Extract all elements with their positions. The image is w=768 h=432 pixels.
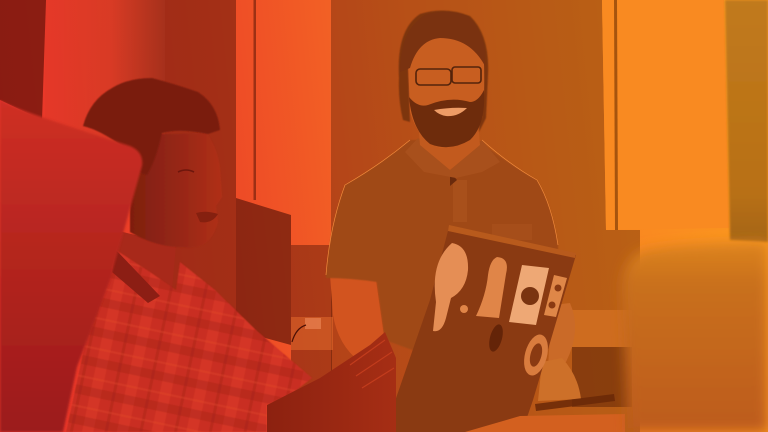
rim light on shirt [326,140,558,275]
outlet shelf [291,317,333,350]
dark space under ledge [572,347,632,407]
white ledge behind man [572,310,632,407]
seated man [66,78,396,432]
right dark column [725,0,768,242]
eye [178,170,194,172]
right arm [548,303,575,366]
shirt [326,140,558,360]
neck and chest [115,230,176,290]
hair [83,78,220,175]
dark column [165,0,236,345]
wall below first window [291,245,332,432]
window glow [602,0,729,230]
sticker: ornate [544,275,567,317]
forearm and hands [267,332,396,432]
lid top edge [448,225,576,258]
foreground blurred laptop left [0,100,142,432]
left arm [330,275,384,362]
wall outlet [291,317,333,350]
sticker: dot [460,305,468,313]
dark tablet [535,394,615,411]
outlet cable [292,325,306,342]
outlet plate [305,318,321,329]
dark shadow at shirt opening [450,172,457,186]
shirt placket [453,180,467,222]
right window [602,0,729,230]
sticker: square frame [509,265,549,325]
table surface [465,414,625,432]
pale wall fade [45,0,165,150]
shirt pocket [492,224,532,240]
hand behind laptop [538,358,581,401]
beard [409,90,484,147]
fingers [350,340,394,388]
hair crown [400,12,485,72]
sticker: dark oval [487,323,505,353]
shirt collar [405,138,500,178]
black speaker box [236,198,291,345]
foreground blurred laptop right [622,242,768,432]
laptop lid [392,227,576,432]
shirt collar [112,250,160,303]
plaid shirt [66,250,312,432]
window left strip line [254,0,256,200]
man's laptop [392,225,576,432]
hair [399,10,488,132]
glasses [416,67,481,85]
sticker: penguin [476,257,507,318]
left dark panel [0,0,46,120]
lips [196,212,218,222]
table items [465,394,625,432]
sticker: round badge [520,332,552,378]
smile [434,108,467,116]
window mullion [614,0,618,230]
sticker: round balloon [433,243,468,331]
ledge [572,310,632,347]
face [130,133,222,247]
central dark wall [331,0,640,432]
neck [418,120,480,170]
face [408,36,484,148]
standing man [326,10,581,401]
